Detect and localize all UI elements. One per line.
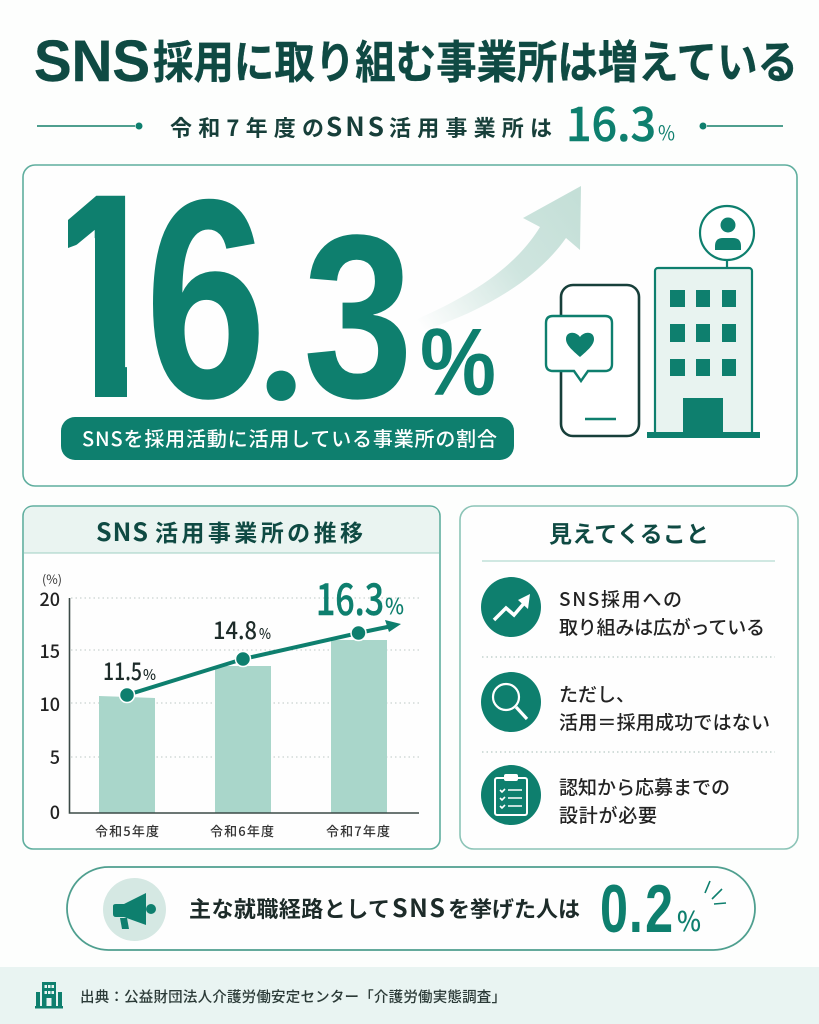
value labels: % <box>385 589 404 621</box>
y axis labels: 15 <box>39 638 60 664</box>
subtitle with rate: 16.3 <box>566 89 656 155</box>
subtitle with rate: 活用事業所は <box>389 111 552 143</box>
icon: office building <box>647 206 760 438</box>
chart header <box>24 507 439 553</box>
footer band <box>0 967 819 1024</box>
trend line with points <box>120 620 401 702</box>
x axis labels: 令和7年度 <box>326 821 390 840</box>
y axis labels: (%) <box>42 569 62 588</box>
value labels <box>103 566 404 687</box>
takeaways heading: 見えてくること <box>549 515 709 549</box>
x axis labels: 令和6年度 <box>210 821 274 840</box>
callout text: SNS <box>392 889 445 925</box>
takeaway 2: 活用＝採用成功ではない <box>559 708 770 735</box>
callout figure: % <box>677 900 701 939</box>
x axis labels: 令和5年度 <box>95 821 159 840</box>
panel: trend chart <box>23 506 440 849</box>
subtitle with rate: SNS <box>326 107 384 144</box>
panel: takeaways <box>460 506 798 849</box>
takeaway 3 <box>559 773 730 828</box>
axes <box>70 598 419 813</box>
value labels: 16.3 <box>316 566 384 628</box>
big number: 3 <box>303 186 413 447</box>
callout text: 主な就職経路として <box>189 892 390 924</box>
y axis labels: 0 <box>50 799 60 825</box>
icon: rising chart <box>481 577 541 637</box>
callout text: を挙げた人は <box>448 892 580 924</box>
chart gridlines <box>71 598 420 757</box>
big number <box>68 196 406 401</box>
subtitle with rate: 令和7年度の <box>170 111 324 143</box>
panel: headline figure <box>23 132 797 486</box>
takeaway 1: SNS採用への <box>559 585 682 612</box>
subtitle with rate <box>37 89 783 155</box>
big number: 1 <box>43 132 166 459</box>
takeaway 2 <box>559 680 770 735</box>
percent sign: % <box>420 309 496 416</box>
value labels: 14.8 <box>213 611 257 646</box>
source text: 出典：公益財団法人介護労働安定センター「介護労働実態調査」 <box>80 986 506 1007</box>
y axis labels: 5 <box>50 744 60 770</box>
big number: . <box>257 241 305 439</box>
takeaway 3: 認知から応募までの <box>559 773 730 800</box>
caption pill <box>61 417 514 460</box>
takeaway 2: ただし、 <box>559 680 635 707</box>
caption pill: SNSを採用活動に活用している事業所の割合 <box>82 423 497 452</box>
value labels: % <box>143 664 156 685</box>
bars <box>99 640 387 813</box>
value labels: % <box>259 623 271 644</box>
emphasis rays <box>705 881 726 904</box>
y axis labels: 10 <box>39 691 60 717</box>
chart header: SNS <box>96 513 148 549</box>
icon: magnifier <box>481 672 541 732</box>
callout text <box>189 889 580 925</box>
takeaway 1 <box>559 585 765 640</box>
growth arrow <box>415 186 581 330</box>
takeaway 3: 設計が必要 <box>559 801 657 828</box>
takeaway 1: 取り組みは広がっている <box>559 613 765 640</box>
icon: smartphone with heart bubble <box>546 285 639 436</box>
x axis labels <box>95 821 390 840</box>
value labels: 11.5 <box>103 652 142 687</box>
title: SNS <box>34 29 150 94</box>
chart header: 活用事業所の推移 <box>155 514 363 548</box>
big number: 6 <box>145 140 267 458</box>
y axis labels <box>39 569 62 825</box>
icon: clipboard <box>481 765 541 825</box>
icon: buildings <box>35 982 63 1008</box>
y axis labels: 20 <box>39 586 60 612</box>
icon: megaphone <box>103 878 166 941</box>
callout: 0.2% <box>67 867 755 950</box>
callout figure: 0.2 <box>600 871 673 947</box>
subtitle with rate: % <box>658 117 675 146</box>
